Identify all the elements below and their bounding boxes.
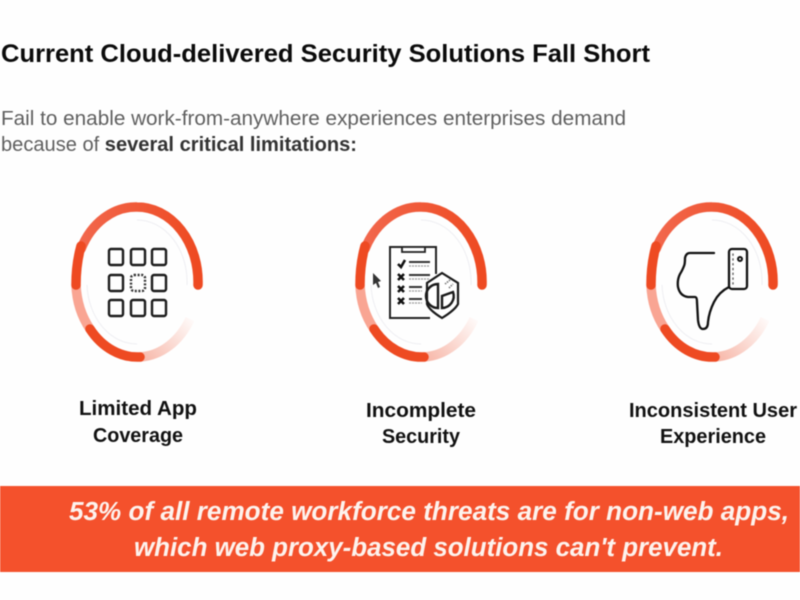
ring: security: [360, 207, 482, 357]
subtitle text block: [1, 107, 626, 156]
icon: checklist with shield: [390, 247, 458, 318]
callout text: [69, 498, 789, 562]
title: Current Cloud-delivered Security Solutions Fall Short: [1, 40, 651, 68]
label: limited app coverage: [79, 398, 197, 447]
subtitle text block: because of several critical limitations:: [1, 133, 357, 156]
panel: incomplete security: [360, 207, 482, 448]
icon: thumbs down: [678, 249, 747, 329]
icon: app grid: [109, 249, 166, 316]
panel: inconsistent user experience: [629, 207, 797, 448]
ring: app coverage: [76, 207, 198, 357]
ring: experience: [651, 207, 773, 357]
label: inconsistent user experience: Inconsistent User: [629, 400, 797, 422]
label: limited app coverage: Coverage: [93, 425, 183, 447]
label: incomplete security: Security: [382, 426, 461, 448]
label: limited app coverage: Limited App: [79, 398, 197, 420]
callout text: 53% of all remote workforce threats are for non-web apps,: [69, 498, 789, 526]
label: inconsistent user experience: [629, 400, 797, 448]
icon: cursor: [373, 273, 381, 288]
callout banner: [0, 486, 800, 572]
subtitle text block: Fail to enable work-from-anywhere experiences enterprises demand: [1, 107, 626, 130]
label: incomplete security: [366, 400, 476, 448]
label: incomplete security: Incomplete: [366, 400, 476, 422]
label: inconsistent user experience: Experience: [660, 426, 766, 448]
callout text: which web proxy-based solutions can't prevent.: [134, 534, 723, 562]
panel: limited app coverage: [76, 207, 198, 447]
